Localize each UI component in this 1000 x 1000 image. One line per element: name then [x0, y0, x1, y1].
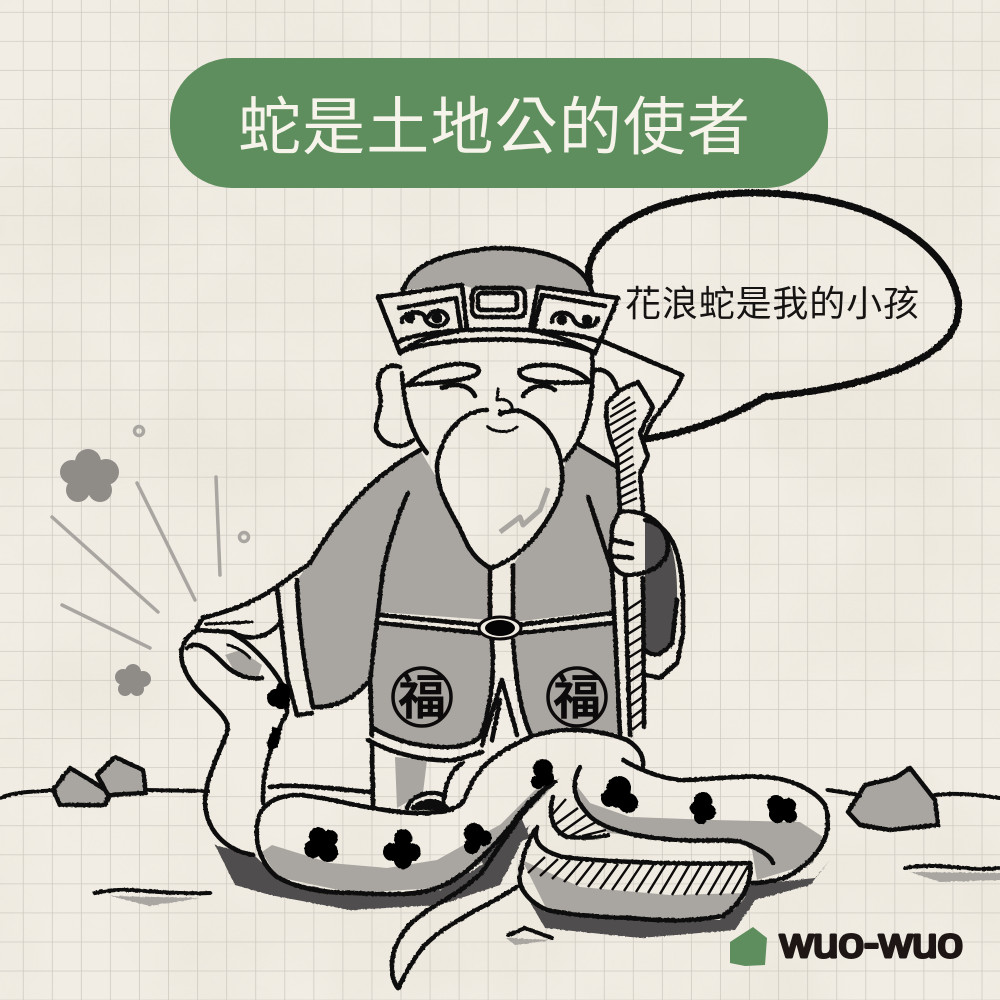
brand wordmark: wuo-wuo	[779, 919, 963, 966]
dark sleeve lining	[645, 520, 677, 657]
snake coils	[257, 730, 828, 988]
robe outlines	[275, 443, 683, 760]
logo	[730, 919, 963, 966]
beard strand	[500, 488, 548, 532]
fu emblems: 福	[553, 658, 601, 728]
decorative burst marks	[52, 426, 248, 696]
grey robe fills	[225, 248, 823, 921]
hat	[378, 248, 618, 353]
earth god figure	[181, 248, 828, 988]
snake head and neck	[181, 630, 287, 855]
line art	[181, 248, 828, 988]
ground and rocks	[0, 757, 1000, 945]
speech bubble	[588, 193, 959, 439]
fu emblems: 福	[398, 658, 446, 728]
hat flap	[600, 340, 682, 440]
snake spots	[267, 683, 797, 869]
speech bubble text: 花浪蛇是我的小孩	[625, 275, 919, 327]
belt buckle	[479, 617, 521, 639]
icon: house	[730, 927, 767, 966]
title: 蛇是土地公的使者	[238, 77, 750, 168]
staff and hand	[606, 382, 668, 735]
legs	[270, 745, 463, 807]
fu emblems	[393, 658, 606, 728]
title	[170, 58, 828, 188]
hatching	[528, 397, 748, 895]
face	[376, 353, 617, 568]
snake shadows	[215, 825, 830, 938]
hand on head	[197, 588, 278, 637]
